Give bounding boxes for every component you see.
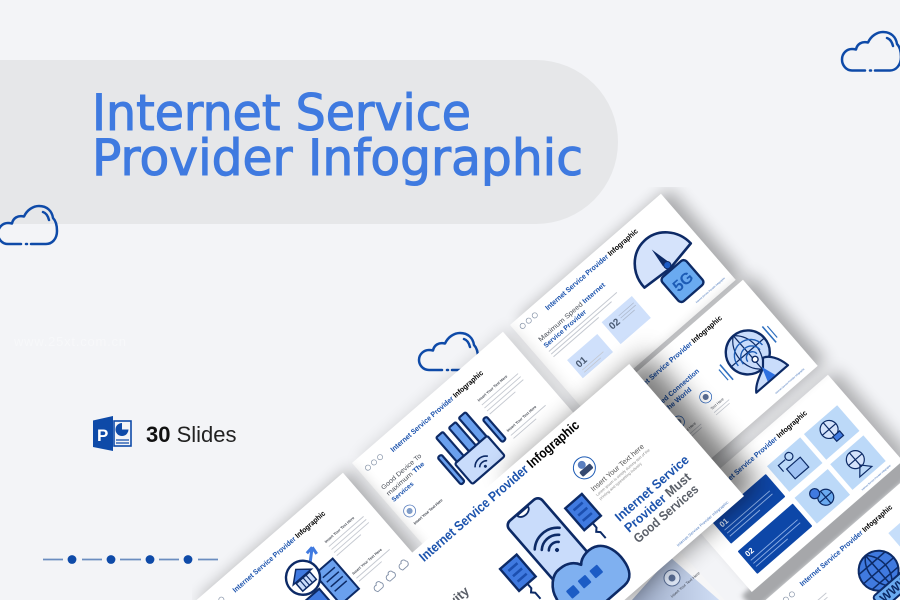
slide: partially hidden panel	[590, 530, 780, 600]
text block: insert your text: Lorem ipsum is simply dummy text of the	[595, 448, 651, 497]
slide: building analytics: Insert Your Text Here	[352, 548, 383, 576]
slide: 5G speed	[510, 187, 745, 413]
icon: circle badge	[569, 452, 600, 483]
slide: good device: Insert Your Text Here	[477, 375, 508, 402]
slide: good device: Good Device To	[380, 453, 424, 492]
slide: building analytics: Insert Your Text Here	[324, 516, 355, 544]
main slide footer: Internet Service Provider Infographic	[676, 500, 729, 547]
slide: good device: Insert Your Text Here	[506, 405, 537, 433]
title pill	[0, 60, 618, 224]
slide: 5G speed: Service Provider	[543, 309, 588, 350]
slide: global connection: Internet Service Provider Infographic	[627, 313, 724, 400]
slide: global connection: Text Here	[710, 397, 725, 411]
slide: 5G speed: Internet Service Provider Infographic	[695, 276, 726, 304]
slide: global connection: In The World	[657, 387, 693, 420]
slide: good device: Internet Service Provider Infographic	[389, 368, 485, 454]
slide: building analytics	[192, 468, 424, 600]
slide: global connection	[592, 273, 827, 499]
slide: global connection: Text Here	[682, 422, 697, 435]
icon: small clouds	[372, 558, 410, 592]
slide count: 30 Slides	[146, 422, 237, 447]
slide: WWW globe	[764, 470, 900, 600]
title: Provider Infographic	[92, 129, 583, 187]
main slide heading: Good Services	[630, 481, 701, 546]
icon: cloud top right	[842, 32, 900, 70]
icon: PowerPoint	[93, 416, 131, 451]
slide: tiles: Internet Service Provider Infographic	[712, 408, 809, 495]
slide: 5G speed: 02	[607, 316, 623, 332]
watermark: www.25xt.com.cn	[13, 334, 126, 349]
slide: global connection: High Speed Connection	[637, 368, 701, 425]
main slide heading: Provider Must	[621, 469, 694, 535]
dotted line decoration	[43, 555, 218, 564]
title: Internet Service	[92, 84, 471, 142]
slide: tiles: Internet Service Provider Infographic	[861, 464, 892, 491]
slide: 5G speed: Internet Service Provider Infographic	[543, 227, 640, 312]
icon: cloud left	[0, 206, 57, 244]
slide: global connection: Internet Service Provider Infographic	[775, 367, 806, 395]
text block: insert your text: Insert Your Text here	[589, 442, 646, 493]
slide: tiles: 01	[718, 516, 731, 529]
slide: 5G speed: 01	[574, 354, 590, 370]
main slide heading	[612, 452, 710, 546]
slide: good device: Services	[391, 481, 416, 504]
slide: tiles	[669, 349, 900, 600]
main slide title: Internet Service Provider Infographic	[416, 417, 582, 565]
slide: 5G speed: 5G	[670, 269, 697, 296]
main slide heading: Internet Service	[612, 452, 692, 524]
slide: 5G speed: Maximum Speed Internet	[537, 281, 608, 344]
icon: phone with cloud and documents	[480, 474, 645, 600]
slide: building analytics: Internet Service Provider Infographic	[231, 509, 327, 594]
icon: PowerPoint: P	[97, 426, 108, 445]
text block: insert your text: printing and typesetting industry	[599, 462, 643, 501]
slide: good device	[352, 327, 584, 550]
slide: good device: Insert Your Text Here	[412, 497, 444, 526]
slide: main	[365, 350, 760, 600]
slide: partially hidden panel: Insert Your Text Here	[669, 570, 701, 599]
slide: tiles: 02	[743, 546, 756, 559]
icon: cloud middle	[419, 333, 478, 370]
slide: good device: maximum The	[385, 460, 427, 498]
slide: WWW globe: Internet Service Provider Infographic	[798, 503, 894, 588]
slide collage	[192, 187, 900, 600]
title	[92, 84, 583, 187]
